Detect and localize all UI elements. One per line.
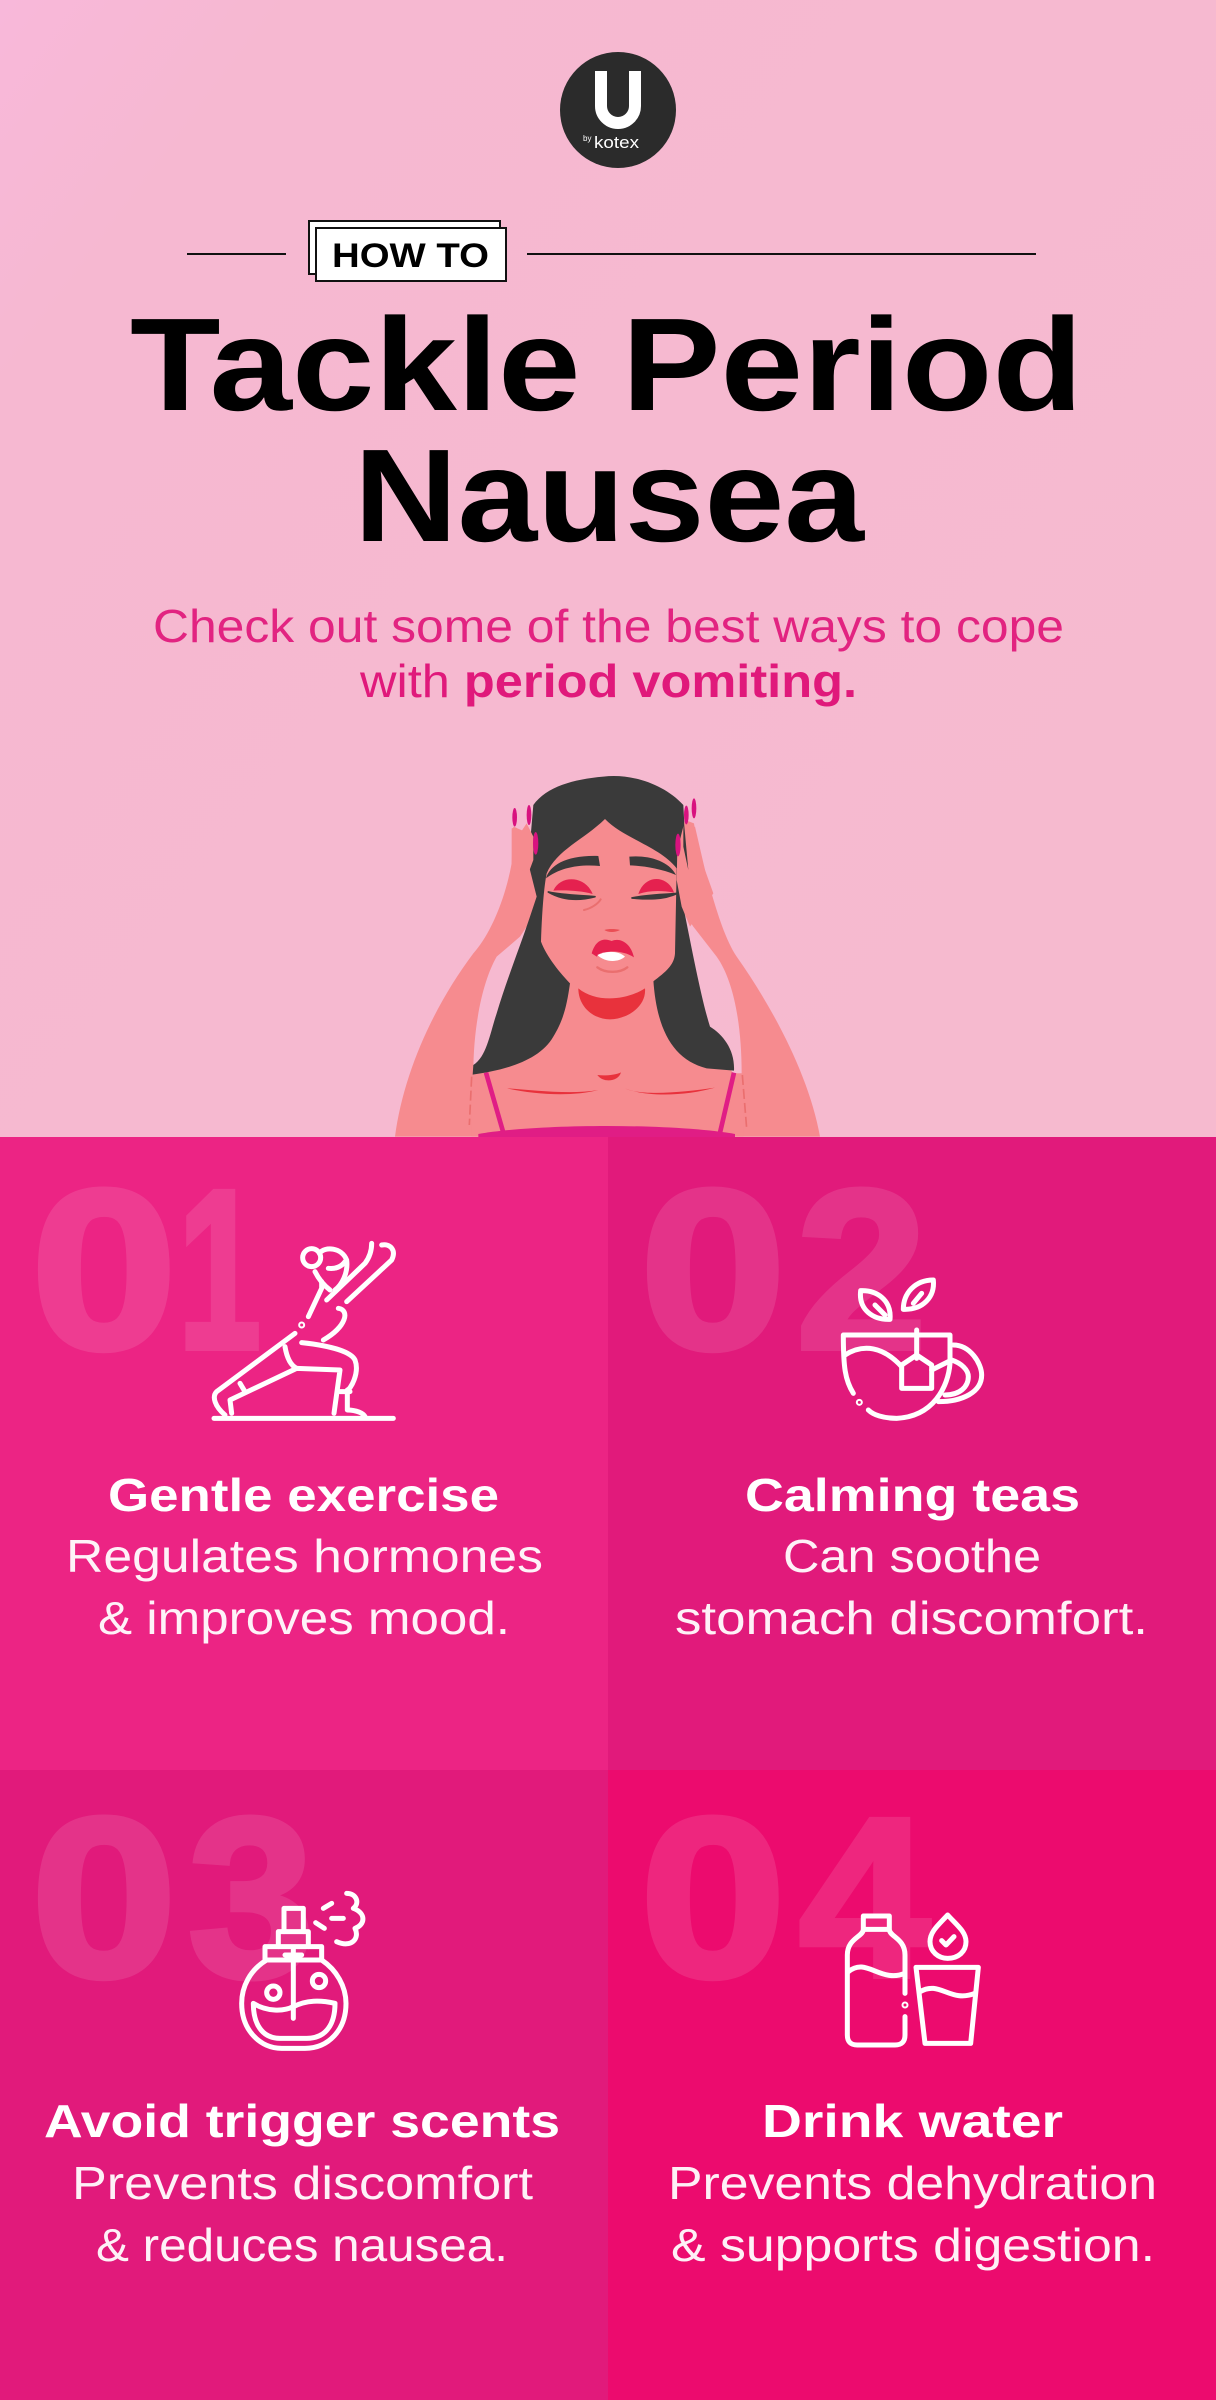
number 01: 0 — [31, 1144, 177, 1397]
hair lock over right hand — [683, 815, 688, 870]
collarbones — [507, 1088, 598, 1094]
number 03 — [31, 1772, 314, 2025]
number 03: 3 — [188, 1772, 314, 2025]
title: Tackle Period — [130, 291, 1083, 438]
heading: Calming teas — [745, 1469, 1080, 1521]
number 03: 0 — [31, 1772, 177, 2025]
heading rule left — [187, 253, 286, 255]
title: Nausea — [354, 422, 866, 569]
panel 1: gentle exercise — [0, 1137, 608, 1770]
neck shadow — [578, 988, 645, 1019]
description: & supports digestion. — [671, 2219, 1155, 2271]
subtitle — [153, 600, 1064, 707]
description: Prevents dehydration — [668, 2157, 1157, 2209]
icon: water bottle and glass — [847, 1915, 978, 2045]
heading rule right — [527, 253, 1036, 255]
panel 3: avoid trigger scents — [0, 1770, 608, 2400]
number 04 — [640, 1772, 930, 2025]
description: Prevents discomfort — [72, 2157, 533, 2209]
description: stomach discomfort. — [675, 1592, 1148, 1644]
description — [675, 1530, 1148, 1644]
number 04: 0 — [640, 1772, 786, 2025]
panel 4: drink water — [608, 1770, 1216, 2400]
illustration: woman holding head — [395, 776, 820, 1137]
panel 2: calming teas — [608, 1137, 1216, 1770]
nose — [604, 929, 620, 932]
title — [130, 291, 1083, 569]
hair — [473, 776, 734, 1075]
number 02 — [640, 1144, 927, 1397]
bra straps — [486, 1073, 503, 1133]
arm creases — [469, 1075, 747, 1128]
how to badge: HOW TO — [332, 237, 489, 275]
logo — [560, 52, 676, 168]
number 02: 0 — [640, 1144, 786, 1397]
heading: Avoid trigger scents — [44, 2095, 560, 2147]
face — [541, 819, 677, 994]
heading: Gentle exercise — [108, 1469, 499, 1521]
how to badge — [309, 221, 506, 281]
nails — [512, 798, 696, 856]
neck and torso — [472, 973, 743, 1137]
lower lip crease — [597, 967, 627, 972]
logo: by — [583, 134, 591, 143]
number 01 — [31, 1144, 261, 1397]
eyelashes — [548, 892, 595, 899]
logo: kotex — [594, 133, 640, 152]
left hand — [512, 823, 533, 873]
subtitle: Check out some of the best ways to cope — [153, 600, 1064, 652]
description: & reduces nausea. — [96, 2219, 508, 2271]
cheek line — [584, 899, 601, 910]
number 01: 1 — [178, 1144, 261, 1397]
eye shadow — [553, 879, 593, 894]
right hand — [677, 820, 713, 927]
description — [72, 2157, 533, 2271]
description: Regulates hormones — [66, 1530, 543, 1582]
eyebrows — [546, 856, 600, 878]
number 04: 4 — [799, 1772, 930, 2025]
header background — [0, 0, 1216, 1138]
subtitle: with period vomiting. — [359, 655, 857, 707]
description: Can soothe — [783, 1530, 1041, 1582]
description — [668, 2157, 1157, 2271]
icon: yoga pose — [214, 1243, 393, 1418]
description: & improves mood. — [98, 1592, 510, 1644]
icon: tea cup — [843, 1280, 982, 1418]
icon: perfume bottle — [242, 1893, 363, 2048]
description — [66, 1530, 543, 1644]
heading: Drink water — [762, 2095, 1063, 2147]
lips — [592, 940, 634, 957]
number 02: 2 — [796, 1144, 927, 1397]
arms and chest — [395, 827, 820, 1137]
top neckline — [478, 1126, 735, 1137]
mouth — [597, 952, 625, 961]
